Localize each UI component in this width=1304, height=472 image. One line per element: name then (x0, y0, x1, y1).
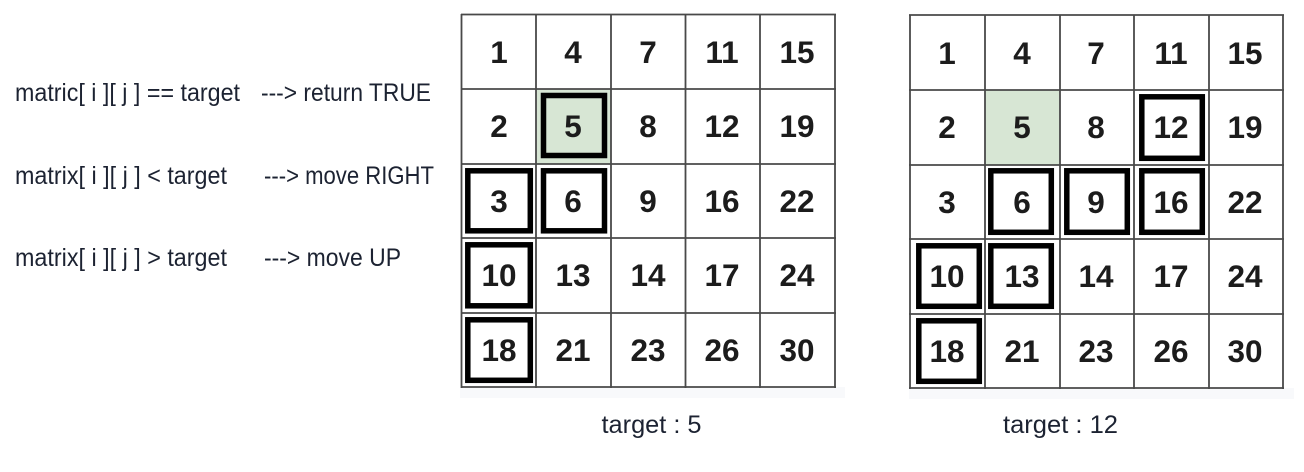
numbers: 21 (555, 332, 591, 368)
rules text block (15, 79, 434, 272)
numbers: 10 (929, 258, 965, 294)
numbers: 13 (555, 257, 591, 293)
rule: equal returns true: matric[ i ][ j ] == target (15, 79, 240, 107)
numbers: 4 (1013, 35, 1031, 71)
rule: less moves right: matrix[ i ][ j ] < target (15, 162, 227, 190)
rule: less moves right: ---> move RIGHT (264, 162, 434, 190)
numbers: 23 (630, 332, 666, 368)
numbers: 3 (938, 184, 956, 220)
matrix panel: target 12 (909, 15, 1294, 399)
numbers: 6 (564, 183, 582, 219)
numbers: 15 (779, 34, 815, 70)
numbers: 23 (1078, 333, 1114, 369)
numbers: 17 (704, 257, 740, 293)
matrix panel: target 5 (460, 14, 845, 398)
numbers: 2 (938, 109, 956, 145)
rule: less moves right (15, 162, 434, 190)
numbers: 15 (1227, 35, 1263, 71)
numbers: 30 (1227, 333, 1263, 369)
numbers: 5 (564, 108, 582, 144)
numbers: 9 (639, 183, 657, 219)
rule: greater moves up (15, 244, 401, 272)
numbers: 14 (630, 257, 666, 293)
numbers: 3 (490, 183, 508, 219)
numbers: 7 (639, 34, 657, 70)
numbers: 19 (1227, 109, 1263, 145)
numbers: 22 (779, 183, 815, 219)
numbers: 2 (490, 108, 508, 144)
numbers: 7 (1087, 35, 1105, 71)
numbers: 12 (704, 108, 740, 144)
grid lines (909, 15, 1284, 389)
rule: equal returns true (15, 79, 431, 107)
numbers: 13 (1004, 258, 1040, 294)
numbers: 4 (564, 34, 582, 70)
rule: greater moves up: matrix[ i ][ j ] > target (15, 244, 227, 272)
grid lines (461, 14, 836, 388)
numbers: 14 (1078, 258, 1114, 294)
numbers: 11 (1154, 35, 1188, 71)
numbers: 6 (1013, 184, 1031, 220)
numbers: 8 (639, 108, 657, 144)
numbers: 8 (1087, 109, 1105, 145)
numbers: 22 (1227, 184, 1263, 220)
numbers: 30 (779, 332, 815, 368)
numbers: 12 (1153, 109, 1189, 145)
rule: greater moves up: ---> move UP (264, 244, 401, 272)
numbers: 21 (1004, 333, 1040, 369)
numbers: 24 (1227, 258, 1263, 294)
numbers: 1 (938, 35, 956, 71)
caption: target 5: target : 5 (602, 411, 702, 439)
numbers: 9 (1087, 184, 1105, 220)
search path highlight boxes (919, 97, 1202, 381)
numbers: 26 (704, 332, 740, 368)
numbers: 11 (705, 34, 739, 70)
numbers (481, 34, 815, 368)
numbers: 10 (481, 257, 517, 293)
numbers: 5 (1013, 109, 1031, 145)
numbers (929, 35, 1263, 369)
numbers: 16 (1153, 184, 1189, 220)
rule: equal returns true: ---> return TRUE (261, 79, 431, 107)
numbers: 16 (704, 183, 740, 219)
numbers: 18 (481, 332, 517, 368)
numbers: 26 (1153, 333, 1189, 369)
search path highlight boxes (468, 96, 604, 380)
numbers: 19 (779, 108, 815, 144)
numbers: 17 (1153, 258, 1189, 294)
numbers: 24 (779, 257, 815, 293)
numbers: 18 (929, 333, 965, 369)
caption: target 12: target : 12 (1003, 411, 1118, 439)
numbers: 1 (490, 34, 508, 70)
